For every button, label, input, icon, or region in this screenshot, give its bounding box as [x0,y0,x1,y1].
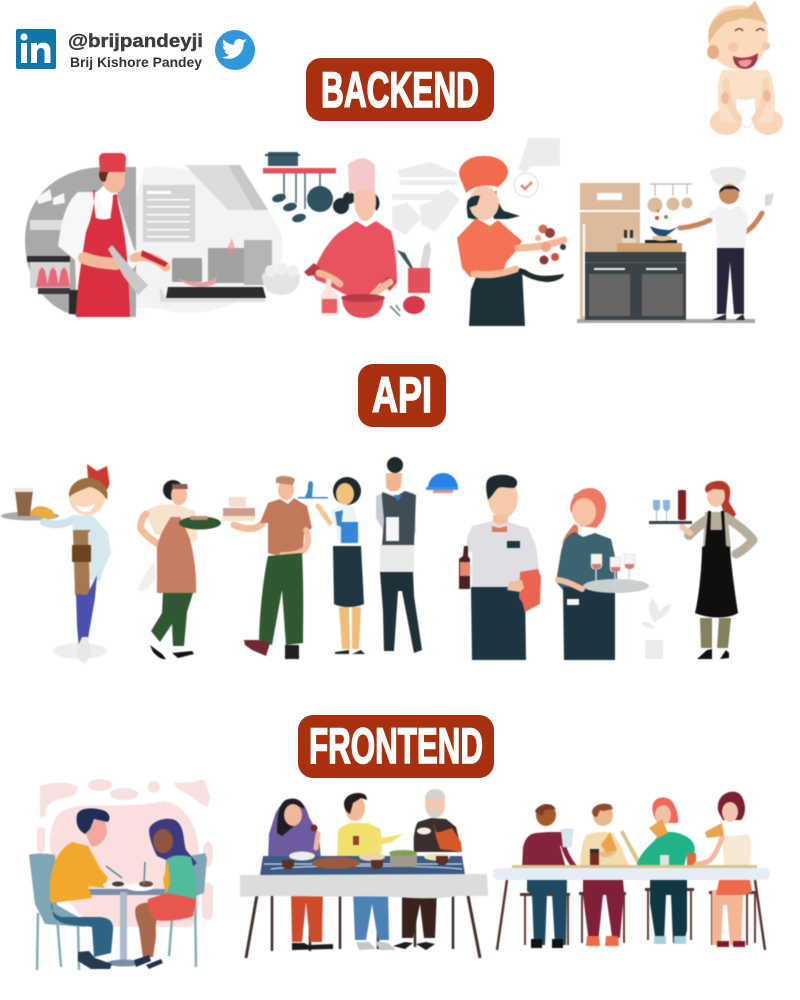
heading: BACKEND: BACKEND [321,62,479,118]
panel: API waiters illustrations [1,457,753,664]
heading: BACKEND [306,58,494,121]
author name: Brij Kishore Pandey [70,55,202,70]
illustration: chef tossing food [392,138,566,326]
illustration: chef at stove [577,167,774,323]
illustration: faded plant [641,598,671,659]
illustration: hostess with folder [318,477,365,654]
illustration: grill chef in kitchen [25,153,300,317]
illustration: laughing baby [707,0,783,135]
heading: FRONTEND: FRONTEND [309,718,483,774]
header: social handles [16,29,255,70]
illustration: couple at small table [29,779,213,970]
heading: FRONTEND [298,715,494,778]
icon: LinkedIn [16,29,56,69]
icon: Twitter [215,30,255,70]
panel: backend kitchen illustrations [25,138,774,326]
icon: blue cloche [426,473,458,493]
heading: API [358,364,446,427]
illustration: family at long table [240,789,488,958]
icon: cloche silhouette [298,481,328,498]
handle: @brijpandeyji [68,31,203,51]
illustration: waiter with bottle [459,475,541,660]
illustration: friends eating pizza [493,792,770,950]
illustration: waitress with wine tray [556,488,649,660]
illustration: waitress in black apron [649,481,753,659]
heading: API: API [372,367,432,423]
illustration: waitress with coffee [1,464,111,664]
illustration: waiter with cake [222,476,312,659]
illustration: pastry chef with bowl [263,152,431,318]
panel: frontend diners illustrations [29,779,770,970]
illustration: waiter in vest [376,457,422,653]
illustration: waitress with apron [138,480,221,659]
